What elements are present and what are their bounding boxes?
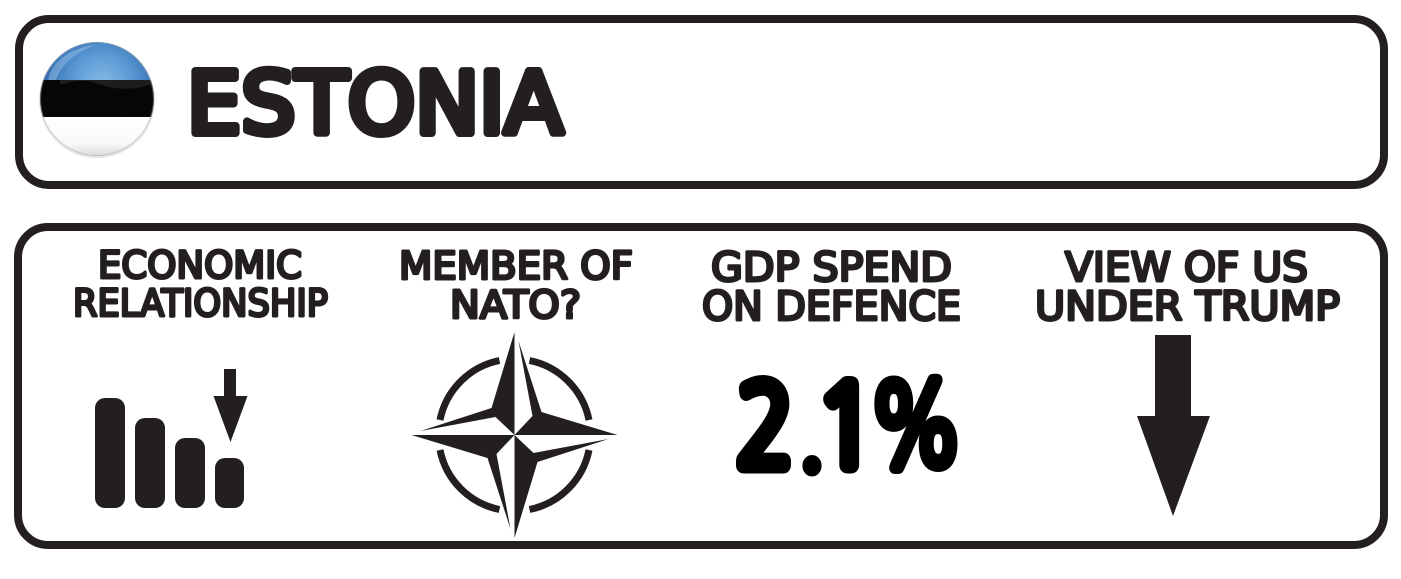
heading: GDP spend on defence	[702, 245, 961, 330]
indicator: economic relationship	[73, 244, 328, 508]
panel: country header	[19, 19, 1384, 185]
indicator: GDP spend on defence	[702, 245, 964, 483]
value: GDP percentage: %	[868, 371, 964, 483]
heading: member of NATO: NATO?	[450, 283, 581, 327]
indicator: member of NATO	[399, 244, 633, 538]
value: GDP percentage: 2	[736, 371, 794, 483]
heading: country name: ESTONIA	[187, 55, 563, 154]
value: GDP percentage: .	[800, 394, 823, 479]
heading: member of NATO: MEMBER OF	[399, 244, 633, 288]
heading: GDP spend on defence: ON DEFENCE	[702, 284, 961, 330]
heading: economic relationship: RELATIONSHIP	[73, 282, 328, 325]
heading: economic relationship: ECONOMIC	[98, 244, 302, 287]
value: GDP percentage: 1	[815, 371, 877, 483]
arrow: large down arrow	[1137, 335, 1210, 516]
heading: view of US under Trump	[1035, 245, 1340, 330]
icon: NATO compass star	[412, 332, 618, 538]
heading: economic relationship	[73, 244, 328, 325]
bar chart: declining bars	[95, 398, 244, 508]
indicator: view of US under Trump	[1035, 245, 1340, 516]
icon: Estonian flag button	[39, 41, 155, 158]
heading: view of US under Trump: UNDER TRUMP	[1035, 284, 1340, 330]
arrow: small down arrow	[214, 369, 248, 442]
value: GDP percentage	[736, 371, 964, 483]
heading: view of US under Trump: VIEW OF US	[1065, 245, 1308, 291]
heading: GDP spend on defence: GDP SPEND	[711, 245, 952, 291]
panel: indicators	[18, 227, 1384, 545]
heading: member of NATO	[399, 244, 633, 327]
